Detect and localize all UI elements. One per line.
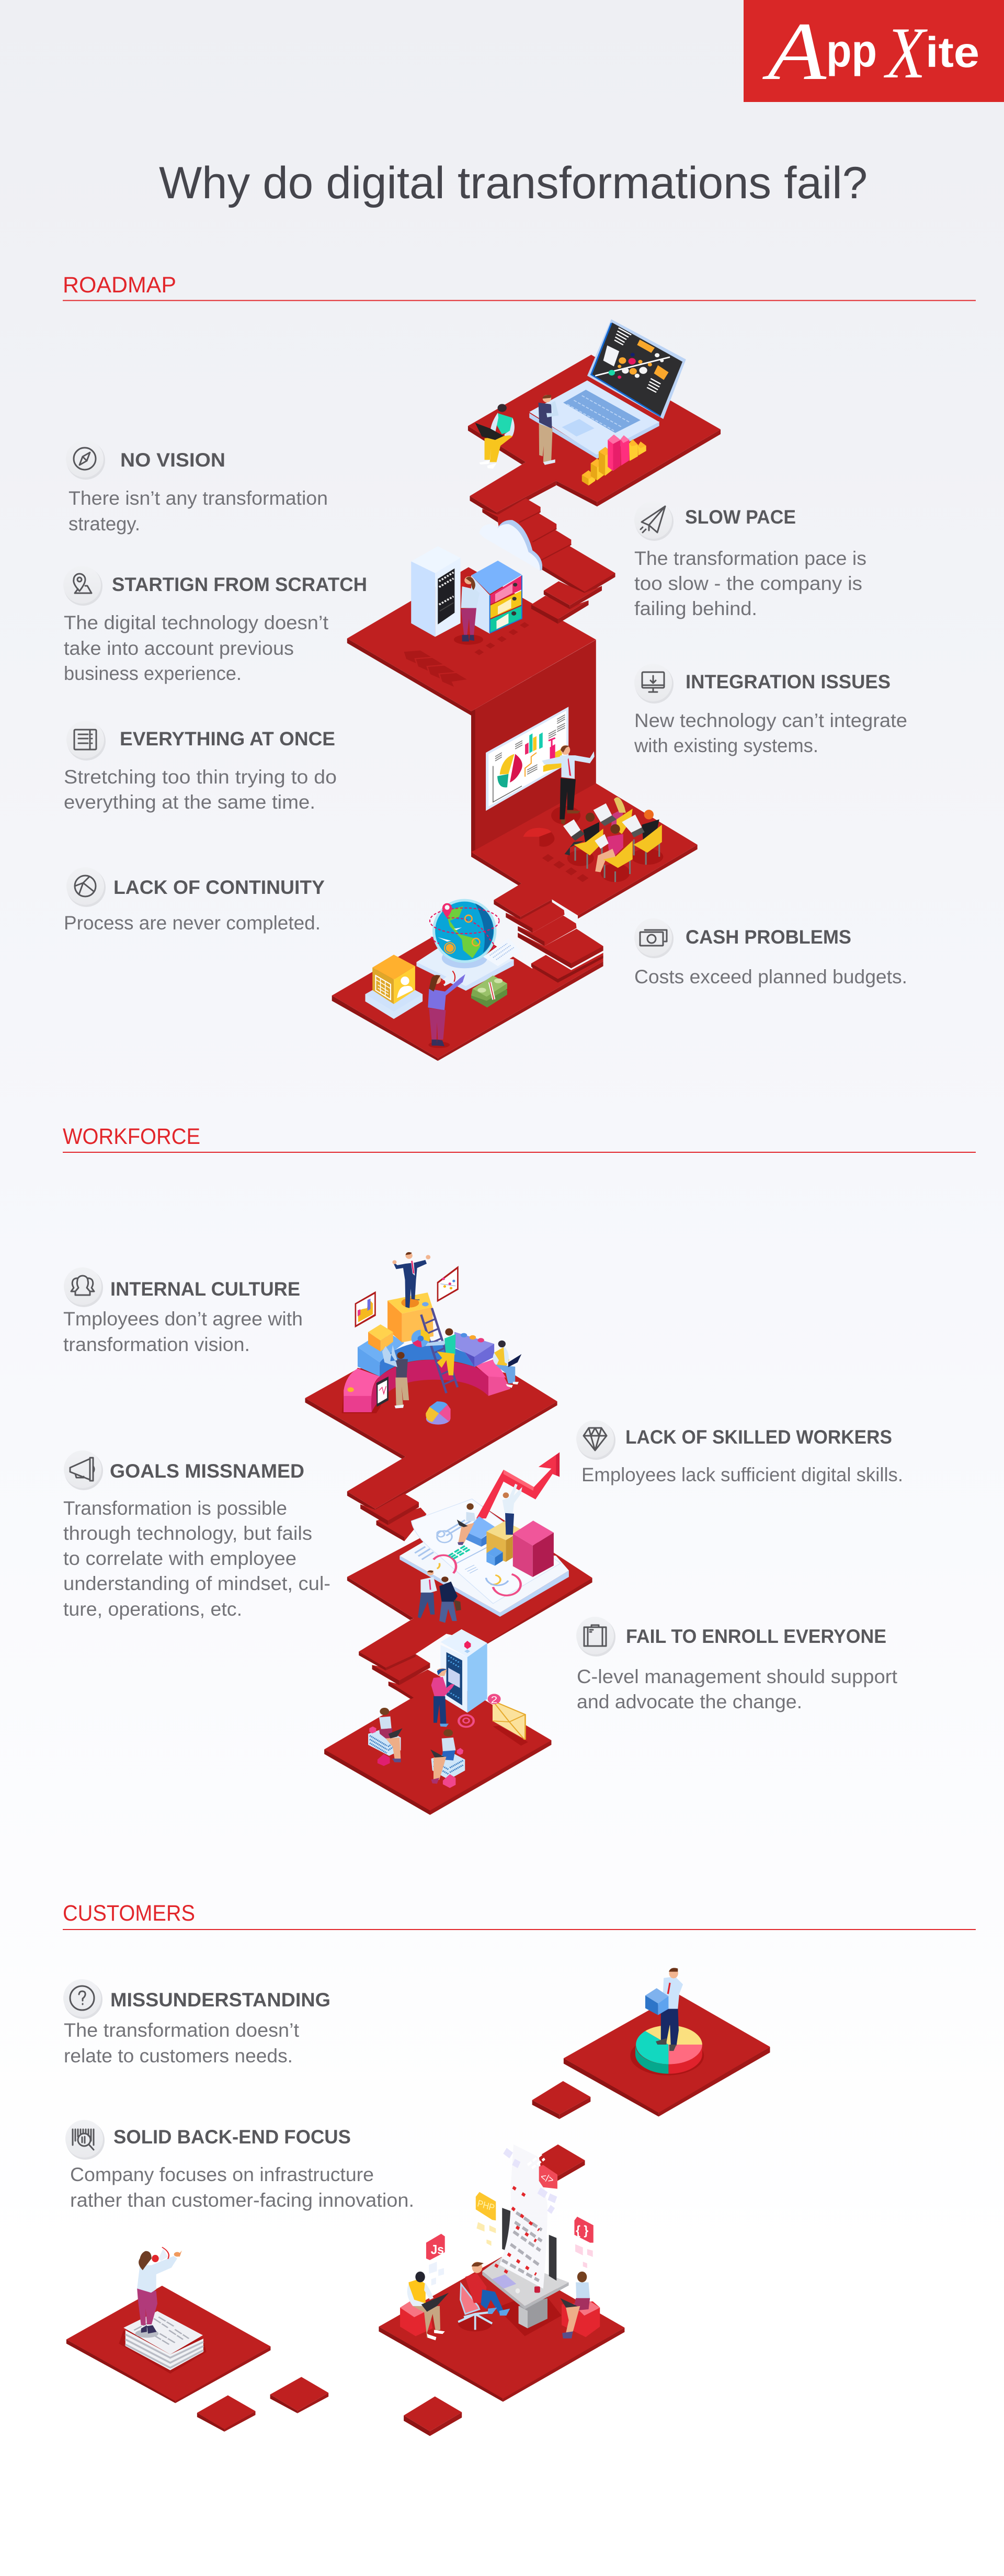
logo: ite xyxy=(926,29,979,76)
person: man holding arrow xyxy=(503,1484,522,1535)
logo: pp xyxy=(826,25,877,76)
feature: goals missnamed: understanding of mindset, cul- xyxy=(63,1573,330,1594)
feature: goals missnamed: through technology, but fails xyxy=(63,1523,312,1544)
binders xyxy=(471,561,522,634)
feature: everything at once: EVERYTHING AT ONCE xyxy=(120,728,335,750)
feature: integration issues xyxy=(634,664,907,756)
illustration: workforce team platform xyxy=(305,1252,557,1541)
feature: solid back-end focus xyxy=(65,2120,414,2211)
feature: internal culture: transformation vision. xyxy=(63,1334,250,1355)
icon: list panel xyxy=(66,721,106,761)
server rack xyxy=(411,546,461,637)
feature: goals missnamed: Transformation is possible xyxy=(63,1497,287,1519)
language badges: Js xyxy=(431,2242,444,2257)
section heading: workforce: WORKFORCE xyxy=(63,1124,200,1149)
step tread xyxy=(531,581,602,623)
feature: everything at once: everything at the same time. xyxy=(64,791,315,813)
stacked boxes xyxy=(368,1292,433,1352)
laptop xyxy=(529,319,686,459)
feature: internal culture: Tmployees don’t agree with xyxy=(63,1308,303,1330)
stairs xyxy=(360,1493,427,1541)
stairs down xyxy=(506,902,603,968)
feature: cash problems: Costs exceed planned budgets. xyxy=(634,966,907,988)
tile xyxy=(532,2081,590,2119)
logo: A xyxy=(762,6,827,97)
stack of papers xyxy=(119,2311,207,2374)
feature: slow pace: The transformation pace is xyxy=(634,548,866,569)
feature: solid back-end focus: rather than customer-facing innovation. xyxy=(70,2189,414,2211)
feature: solid back-end focus: SOLID BACK-END FOCUS xyxy=(113,2126,351,2148)
people shaking hands xyxy=(418,1570,461,1623)
donut chart xyxy=(412,1330,430,1347)
icon: briefcase xyxy=(576,1617,615,1656)
small blue box xyxy=(486,1547,503,1566)
person: woman on server block, right xyxy=(430,1729,465,1788)
feature: startign from scratch: The digital technology doesn’t xyxy=(64,612,329,633)
platform: pie chart with man xyxy=(564,1968,770,2117)
feature: no vision: strategy. xyxy=(69,513,140,535)
feature: startign from scratch xyxy=(63,566,367,684)
logo: X xyxy=(884,13,928,94)
feature: fail to enroll everyone: C-level management should support xyxy=(577,1666,898,1687)
lower platform xyxy=(324,1670,551,1815)
feature: goals missnamed: GOALS MISSNAMED xyxy=(110,1460,304,1482)
desk and computer xyxy=(482,2144,569,2328)
feature: slow pace xyxy=(634,501,866,619)
illustration: globe platform xyxy=(332,899,603,1061)
floor arrows and squares xyxy=(403,621,530,688)
feature: fail to enroll everyone: FAIL TO ENROLL EVERYONE xyxy=(626,1626,886,1647)
person: man in pink at server xyxy=(431,1668,454,1727)
globe on base xyxy=(416,899,521,991)
money stack xyxy=(471,975,507,1007)
icon: monitor download xyxy=(634,664,674,703)
feature: integration issues: New technology can’t integrate xyxy=(634,710,907,731)
server tower xyxy=(440,1629,487,1712)
icon: map pin xyxy=(63,566,102,606)
feature: lack of skilled workers: LACK OF SKILLED WORKERS xyxy=(625,1426,892,1448)
feature: lack of continuity: LACK OF CONTINUITY xyxy=(113,877,325,898)
person: woman at server xyxy=(454,576,483,645)
person: speaker on podium xyxy=(392,1252,430,1308)
feature: lack of continuity: Process are never completed. xyxy=(64,912,321,934)
feature: startign from scratch: STARTIGN FROM SCRATCH xyxy=(112,574,367,595)
person: woman on server block, left xyxy=(368,1708,403,1766)
feature: cash problems xyxy=(634,918,907,988)
growth arrow, blocks and people on report xyxy=(457,1452,560,1577)
feature: startign from scratch: take into account previous xyxy=(64,638,294,659)
feature: missunderstanding: The transformation doesn’t xyxy=(64,2019,300,2041)
feature: integration issues: INTEGRATION ISSUES xyxy=(686,671,891,693)
feature: slow pace: too slow - the company is xyxy=(634,573,862,594)
icon: broken ring xyxy=(66,867,106,907)
person: seated with blue laptop xyxy=(493,1341,521,1388)
person: climbing ladder xyxy=(425,1329,455,1375)
feature: missunderstanding xyxy=(63,1979,330,2067)
feature: no vision xyxy=(66,440,328,535)
stairs xyxy=(482,498,615,595)
person: woman on red seat xyxy=(560,2272,600,2339)
person: yellow vest on red seat xyxy=(400,2272,449,2340)
person: woman with laptop xyxy=(457,1503,475,1545)
section heading: roadmap: ROADMAP xyxy=(63,273,176,298)
code ladder bricks xyxy=(528,2154,545,2168)
feature: no vision: There isn’t any transformation xyxy=(69,487,328,509)
feature: lack of skilled workers: Employees lack sufficient digital skills. xyxy=(581,1464,903,1485)
feature: integration issues: with existing systems. xyxy=(634,735,818,756)
icon: at sign xyxy=(459,1715,474,1727)
mini pie chart xyxy=(426,1401,451,1425)
bar chart blocks xyxy=(582,435,646,485)
feature: no vision: NO VISION xyxy=(120,449,225,471)
language badges: </> xyxy=(540,2171,555,2186)
icon: cloud xyxy=(479,520,542,571)
illustration: server platform and wall xyxy=(347,546,602,854)
illustration: papers platform with woman xyxy=(66,2247,328,2432)
section heading: customers: CUSTOMERS xyxy=(63,1901,195,1926)
yellow box xyxy=(486,1521,521,1562)
stacked report sheets xyxy=(400,1499,569,1617)
floor pie xyxy=(523,828,554,847)
person: woman with megaphone xyxy=(428,971,465,1048)
illustration: report platform xyxy=(324,1452,592,1815)
feature: everything at once: Stretching too thin trying to do xyxy=(64,766,337,788)
ladder xyxy=(421,1308,458,1393)
feature: solid back-end focus: Company focuses on infrastructure xyxy=(70,2164,374,2185)
feature: goals missnamed: to correlate with employee xyxy=(63,1548,296,1569)
person: presenter xyxy=(542,745,595,825)
whiteboard chart xyxy=(486,707,568,811)
feature: slow pace: SLOW PACE xyxy=(685,506,796,528)
feature: missunderstanding: relate to customers needs. xyxy=(64,2045,293,2067)
feature: goals missnamed xyxy=(63,1450,330,1620)
frames with charts xyxy=(355,1266,459,1327)
person: developer on office chair xyxy=(458,2262,510,2331)
tile xyxy=(404,2397,462,2436)
person: lifting box xyxy=(376,1345,409,1409)
illustration: presentation room xyxy=(471,707,698,968)
curved podium blocks xyxy=(342,1332,510,1413)
people at laptops on yellow chairs xyxy=(563,797,663,882)
platform: developers xyxy=(379,2144,624,2402)
feature: slow pace: failing behind. xyxy=(634,598,757,619)
icon: envelope with badge: 2 xyxy=(491,1695,497,1705)
feature: everything at once xyxy=(64,721,337,813)
icon: diamond xyxy=(576,1420,615,1460)
icon: paper plane xyxy=(634,501,674,541)
icon: people group xyxy=(64,1267,103,1307)
icon: question mark xyxy=(63,1979,102,2019)
red growth arrow xyxy=(476,1452,560,1518)
icon: compass xyxy=(66,440,105,480)
pink block xyxy=(513,1520,554,1577)
calendar cube xyxy=(365,955,423,1019)
blue box xyxy=(465,1516,495,1547)
feature: internal culture xyxy=(63,1267,303,1355)
icon: barcode magnifier xyxy=(65,2120,105,2160)
language badges xyxy=(426,2165,594,2286)
feature: lack of skilled workers xyxy=(576,1420,903,1485)
feature: lack of continuity xyxy=(64,867,325,934)
feature: fail to enroll everyone xyxy=(576,1617,898,1712)
feature: missunderstanding: MISSUNDERSTANDING xyxy=(110,1989,330,2011)
feature: fail to enroll everyone: and advocate the change. xyxy=(577,1691,802,1712)
icon: megaphone xyxy=(64,1450,103,1490)
language badges: { } xyxy=(576,2223,589,2238)
logo xyxy=(744,0,1004,102)
feature: startign from scratch: business experience. xyxy=(64,663,242,684)
icon: envelope with badge xyxy=(488,1694,528,1746)
feature: internal culture: INTERNAL CULTURE xyxy=(110,1278,300,1300)
illustration: top laptop platform and stairs xyxy=(468,319,721,595)
title: Why do digital transformations fail? xyxy=(159,158,868,208)
person: woman with megaphone xyxy=(137,2247,182,2333)
tile behind code xyxy=(527,2144,585,2181)
person: standing with tan trousers xyxy=(539,395,558,465)
illustration: customer platforms xyxy=(379,1968,770,2436)
icon: banknotes xyxy=(634,918,674,958)
language badges: PHP xyxy=(476,2198,496,2214)
person: seated with laptop xyxy=(475,404,515,469)
feature: goals missnamed: ture, operations, etc. xyxy=(63,1598,242,1620)
tiles xyxy=(197,2377,328,2432)
feature: cash problems: CASH PROBLEMS xyxy=(686,926,851,948)
stairs xyxy=(372,1654,430,1685)
